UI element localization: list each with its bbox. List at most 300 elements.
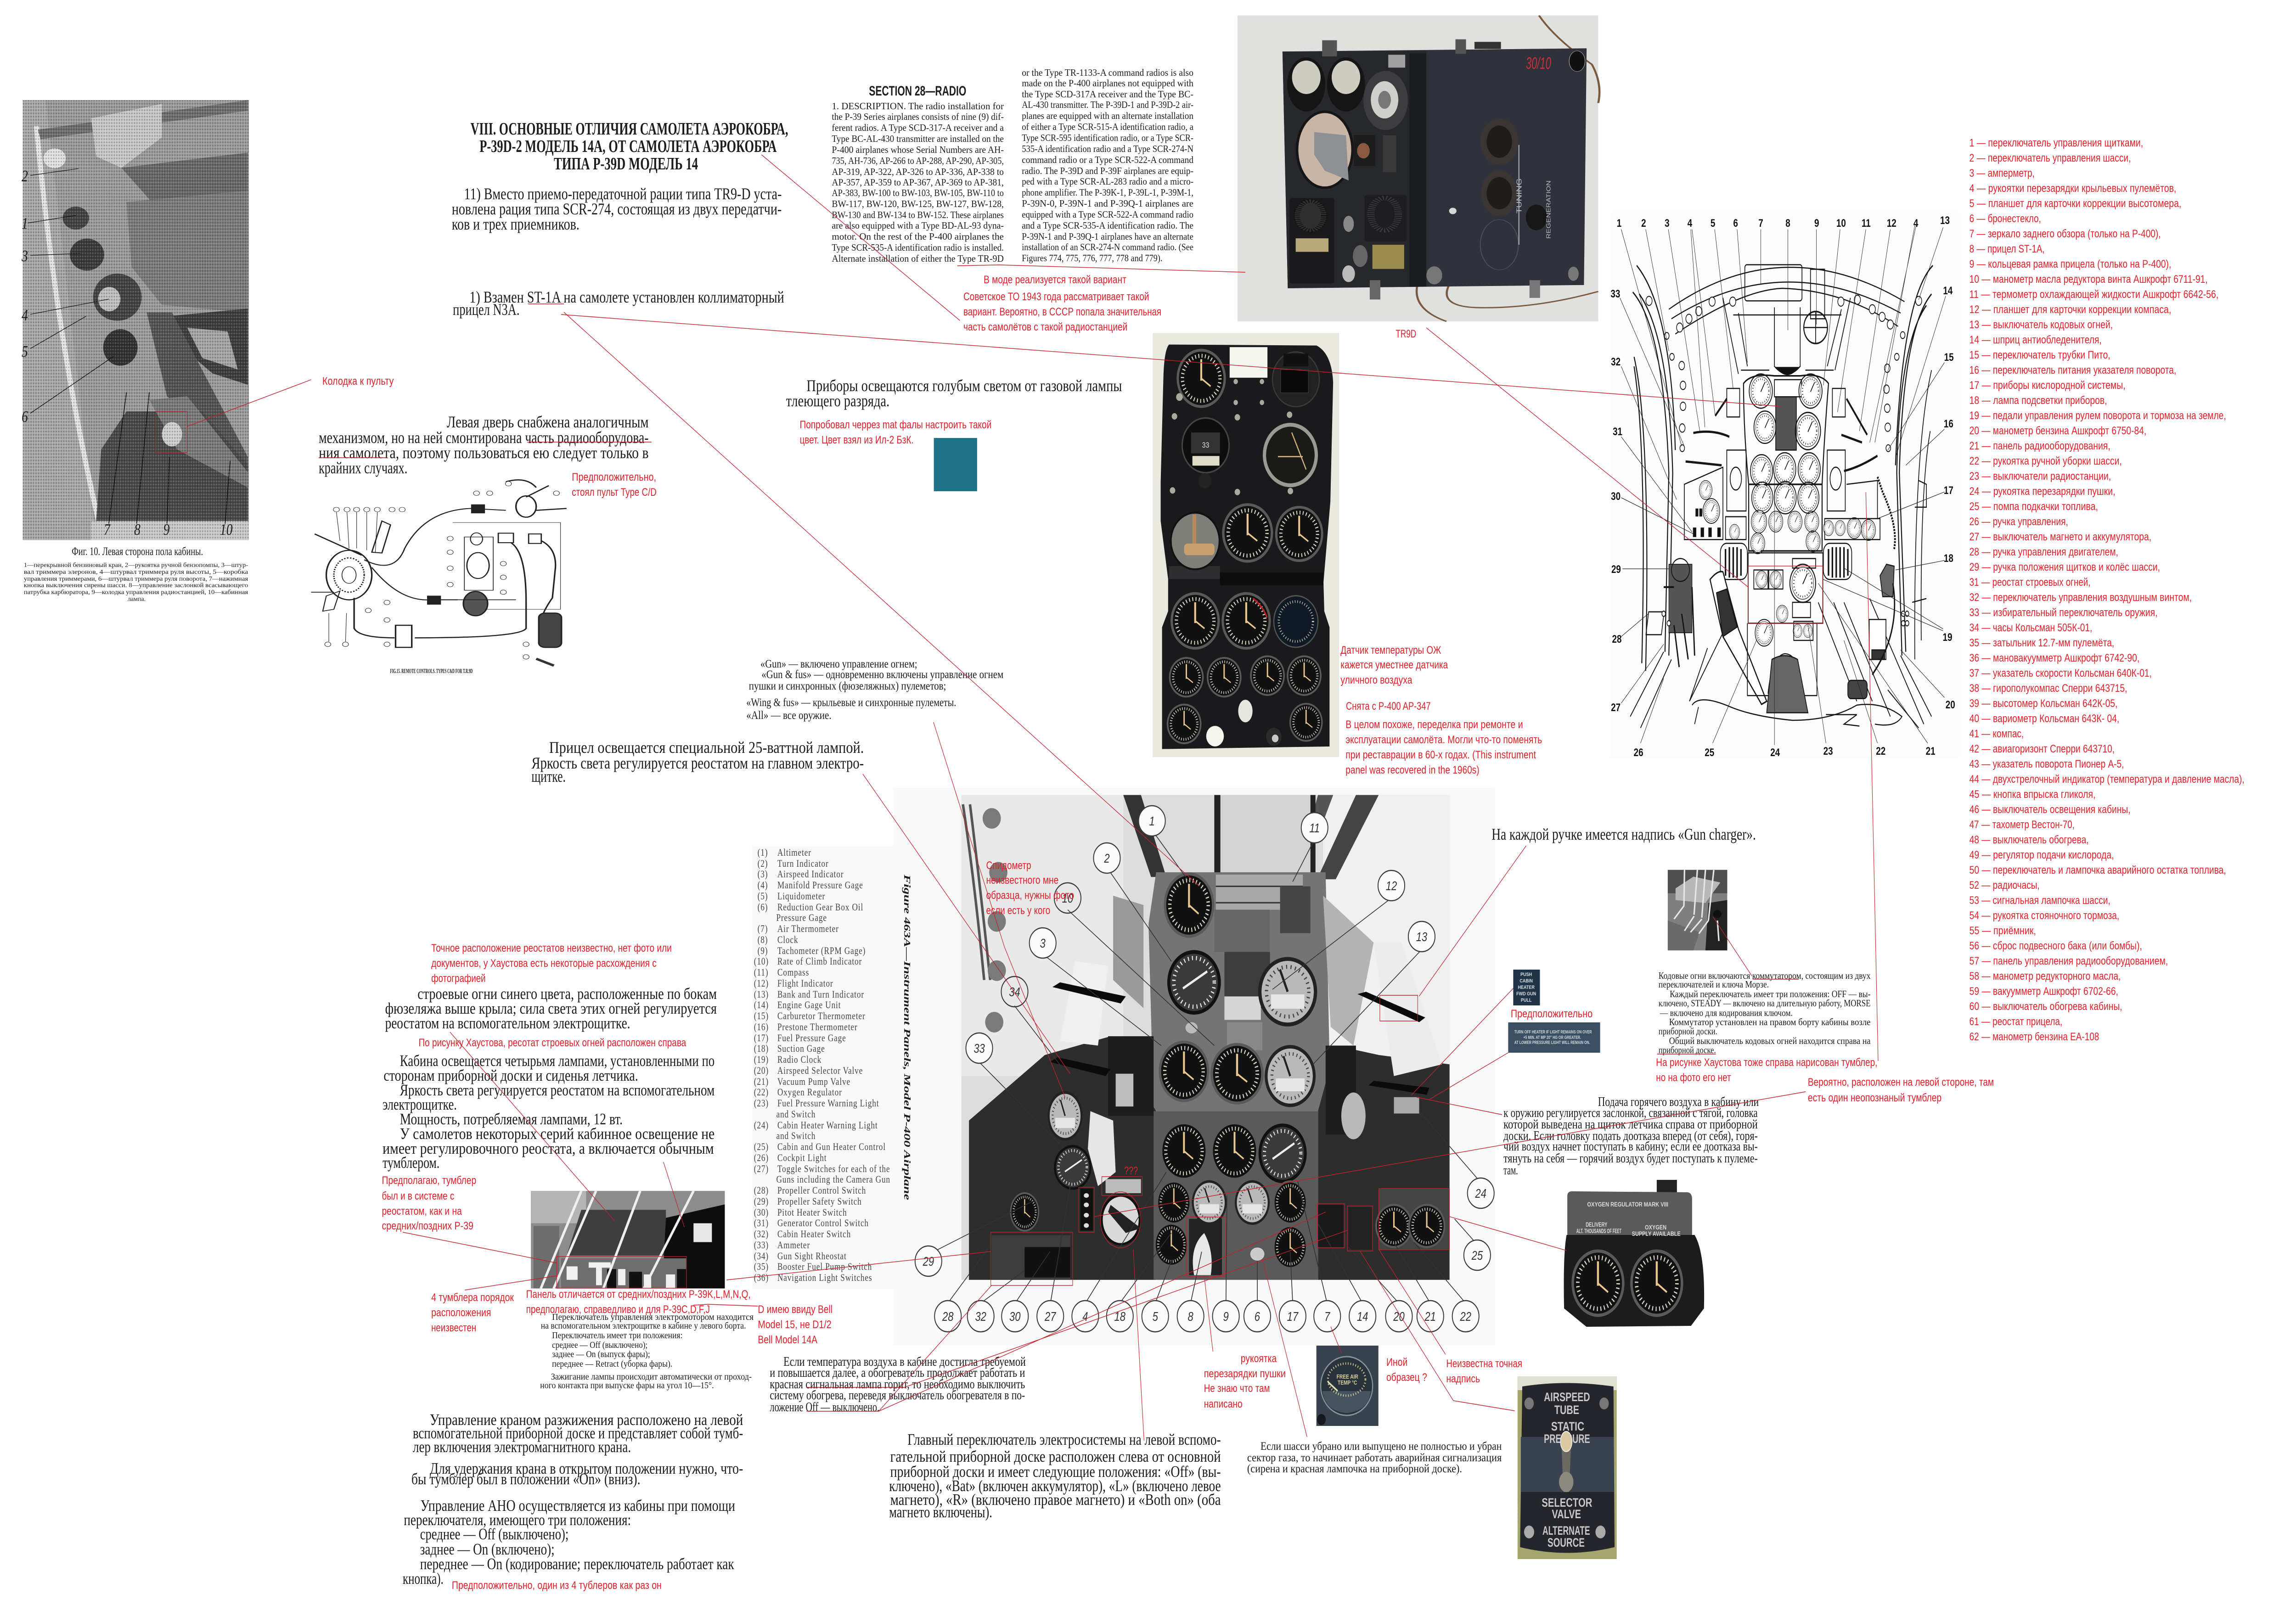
red legend list: numbered cockpit items	[1970, 136, 2245, 1043]
callout numbers: 14	[1943, 284, 1953, 297]
text: weapon selector positions: пушки и синхронных (фюзеляжных) пулеметов;	[749, 679, 946, 692]
red legend list: numbered cockpit items: 29 — ручка положения щитков и колёс шасси,	[1970, 561, 2160, 573]
text block: SECTION 28 RADIO: motor. On the rest of the P-400 airplanes the	[832, 231, 1004, 242]
legend panel: numbered instrument list: Propeller Control Switch	[777, 1185, 866, 1196]
legend panel: numbered instrument list: Oxygen Regulator	[777, 1087, 842, 1098]
note: rheostat location: фотографией	[431, 972, 486, 985]
text: left door: крайних случаях.	[319, 459, 407, 477]
note: remote type C/D: Предположительно,	[572, 471, 656, 483]
text: hot air control: Подача горячего воздуха в кабину или	[1598, 1095, 1759, 1109]
legend panel: numbered instrument list: (30)	[754, 1207, 769, 1218]
callout numbers: 15	[1944, 351, 1954, 364]
note: cannon charging handle: написано	[1204, 1397, 1243, 1410]
red legend list: numbered cockpit items: 45 — кнопка впрыска гликоля,	[1970, 788, 2095, 801]
red legend list: numbered cockpit items: 46 — выключатель освещения кабины,	[1970, 803, 2131, 816]
text block: SECTION 28 RADIO: 735, AH-736, AP-266 to AP-288, AP-290, AP-305,	[832, 156, 1004, 167]
legend panel: numbered instrument list: (16)	[754, 1021, 769, 1033]
callout numbers: 5	[1711, 217, 1715, 230]
red legend list: numbered cockpit items: 40 — вариометр Кольсман 643К- 04,	[1970, 712, 2119, 725]
note: panel differs from later P-39	[526, 1288, 751, 1316]
photo: airspeed tube selector valve placard: SELECTOR	[1542, 1496, 1593, 1510]
text: formation lights: реостатом на вспомогательном электрощитке.	[385, 1014, 630, 1032]
text block: SECTION 28 RADIO: radio. The P-39D and P-39F airplanes are equip-	[1022, 166, 1193, 177]
note: unknown inscription: Неизвестна точная	[1446, 1357, 1522, 1370]
note: Bell model: D имею ввиду Bell	[758, 1303, 833, 1316]
legend panel: numbered instrument list: (33)	[754, 1240, 769, 1251]
legend panel: numbered instrument list: and Switch	[776, 1130, 816, 1142]
text: primer valve control: лер включения электромагнитного крана.	[413, 1438, 631, 1456]
text: formation lights: фюзеляжа выше крыла; сила света этих огней регулируется	[385, 999, 717, 1017]
text block: SECTION 28 RADIO: command radio or a Type SCR-522-A command	[1022, 155, 1194, 166]
text: hot air control	[1503, 1095, 1759, 1178]
numbered circles: 25	[1471, 1249, 1483, 1263]
note: mod variant	[963, 273, 1161, 333]
legend panel: numbered instrument list: (26)	[754, 1152, 769, 1164]
text: code lights: приборной доски.	[1659, 1026, 1717, 1037]
numbered circles: 21	[1424, 1310, 1436, 1324]
callout numbers: 4	[1913, 217, 1918, 230]
text: navigation light control: кнопка).	[403, 1570, 444, 1588]
note: Khaustov toggle	[1656, 1056, 1877, 1084]
callout numbers: 31	[1613, 425, 1622, 438]
red legend list: numbered cockpit items: 13 — выключатель кодовых огней,	[1970, 318, 2113, 331]
note: left side toggle: Вероятно, расположен на левой стороне, там	[1808, 1076, 1994, 1089]
note: mat file colour: цвет. Цвет взял из Ил-2 БзК.	[800, 433, 914, 446]
photo: left side of cockpit floor	[21, 100, 249, 540]
note: unknown inscription	[1446, 1357, 1522, 1385]
legend panel: numbered instrument list: (13)	[754, 989, 769, 1000]
text: landing light control: среднее — Off (выключено);	[552, 1340, 647, 1351]
photo callout numbers: 3	[21, 247, 28, 265]
text: formation lights	[385, 985, 717, 1032]
callout numbers: 32	[1611, 355, 1621, 368]
legend panel: numbered instrument list: (24)	[754, 1120, 769, 1131]
legend panel: numbered instrument list: (28)	[754, 1185, 769, 1196]
note: mat file colour: Попробовал черрез mat фалы настроить такой	[800, 418, 991, 431]
note: cannon charging handle: перезарядки пушки	[1204, 1367, 1286, 1380]
text: master switch: ключено), «Bat» (включен аккумулятор), «L» (включено левое	[889, 1477, 1221, 1495]
text block: SECTION 28 RADIO: 1. DESCRIPTION. The radio installation for	[832, 101, 1004, 112]
red legend list: numbered cockpit items: 22 — рукоятка ручной уборки шасси,	[1970, 454, 2122, 467]
note: coolant gauge: кажется уместнее датчика	[1340, 658, 1448, 671]
text: cabin lights: Кабина освещается четырьмя лампами, установленными по	[400, 1052, 715, 1070]
numbered circles: 2	[1104, 852, 1110, 866]
label: push cabin heater placard: CABIN	[1519, 978, 1533, 984]
callout numbers: 3	[1665, 217, 1670, 230]
legend panel: numbered instrument list: (11)	[754, 967, 768, 978]
note: different sample: Иной	[1386, 1356, 1407, 1369]
legend panel: numbered instrument list: Carburetor Thermometer	[777, 1010, 866, 1022]
numbered circles: 27	[1044, 1310, 1056, 1324]
red legend list: numbered cockpit items: 49 — регулятор подачи кислорода,	[1970, 848, 2114, 861]
text block: SECTION 28 RADIO: Alternate installation of either the Type TR-9D	[832, 253, 1004, 264]
legend panel: numbered instrument list: Ammeter	[777, 1240, 810, 1251]
red legend list: numbered cockpit items: 20 — манометр бензина Ашкрофт 6750-84,	[1970, 424, 2146, 437]
text: landing light control: Переключатель управления электромотором находится	[552, 1312, 754, 1322]
numbered circles: 22	[1460, 1310, 1471, 1324]
note: taken from P-400 AP-347: при реставрации в 60-х годах. (This instrument	[1345, 748, 1536, 761]
text: radio difference: новлена рация типа SCR-274, состоящая из двух передатчи-	[452, 200, 782, 218]
text: radio difference	[452, 185, 782, 233]
red legend list: numbered cockpit items: 59 — вакуумметр Ашкрофт 6702-66,	[1970, 985, 2118, 998]
red legend list: numbered cockpit items: 58 — манометр редукторного масла,	[1970, 970, 2121, 982]
callout numbers: 27	[1611, 701, 1621, 714]
numbered circles	[915, 806, 1494, 1332]
text block: SECTION 28 RADIO: the Type SCD-317A receiver and the Type BC-	[1022, 89, 1193, 100]
diagram: remote controls schematic	[311, 480, 567, 674]
note: Bell model	[758, 1303, 833, 1346]
text: gun sight difference: прицел N3A.	[453, 300, 519, 319]
figure caption: Fig. 10: Фиг. 10. Левая сторона пола кабины.	[72, 545, 203, 558]
legend panel: numbered instrument list: Generator Control Switch	[777, 1218, 869, 1229]
note: panel differs from later P-39: Панель отличается от средних/поздних P-39K,L,M,N,Q,	[526, 1288, 751, 1301]
numbered circles: 32	[975, 1310, 986, 1324]
text: landing light control: Переключатель имеет три положения:	[552, 1330, 682, 1340]
text block: SECTION 28 RADIO: P-39N-1 and P-39Q-1 airplanes have an alternate	[1022, 231, 1193, 242]
text: hot air control: доски. Если головку подать доотказа вперед (от себя), горя-	[1503, 1129, 1758, 1143]
red legend list: numbered cockpit items: 11 — термометр охлаждающей жидкости Ашкрофт 6642-56,	[1970, 288, 2218, 301]
text: cabin lights: Мощность, потребляемая лампами, 12 вт.	[400, 1110, 623, 1128]
label: push cabin heater placard: HEATER	[1518, 985, 1535, 990]
red legend list: numbered cockpit items: 3 — амперметр,	[1970, 167, 2035, 180]
text: cabin lights	[383, 1052, 715, 1172]
text: code lights: Общий выключатель кодовых огней находится справа на	[1669, 1036, 1871, 1047]
red legend list: numbered cockpit items: 15 — переключатель трубки Пито,	[1970, 348, 2110, 361]
schematic caption: FIG.15. REMOTE CONTROLS. TYPES C&D FOR T.R.9D	[390, 668, 473, 674]
photo: TR9D radio set	[1238, 16, 1599, 321]
numbered circles: 24	[1475, 1187, 1486, 1201]
photo callout numbers: 7	[104, 521, 111, 539]
text block: SECTION 28 RADIO: P-400 airplanes whose Serial Numbers are AH-	[832, 145, 1004, 156]
figure caption: Fig. 10: 1—перекрывной бензиновый кран, 2—рукоятка ручной бензопомпы, 3—штур-	[24, 561, 248, 568]
numbered circles: 9	[1223, 1310, 1229, 1324]
callout numbers: 25	[1705, 746, 1714, 759]
red legend list: numbered cockpit items: 5 — планшет для карточки коррекции высотомера,	[1970, 197, 2181, 210]
legend panel: numbered instrument list: Suction Gage	[777, 1043, 825, 1055]
text: hot air control: которой выведена на щиток летчика справа от приборной	[1503, 1118, 1758, 1132]
legend panel: numbered instrument list: Rate of Climb Indicator	[777, 956, 862, 967]
numbered circles: 13	[1416, 930, 1427, 944]
red legend list: numbered cockpit items: 9 — кольцевая рамка прицела (только на Р-400),	[1970, 258, 2171, 270]
note: taken from P-400 AP-347: panel was recovered in the 1960s)	[1345, 763, 1480, 776]
red legend list: numbered cockpit items: 33 — избирательный переключатель оружия,	[1970, 606, 2157, 619]
text: primer valve control: вспомогательной приборной доске и представляет собой тумб-	[413, 1424, 743, 1442]
photo: airspeed tube selector valve placard: ALTERNATE	[1542, 1524, 1590, 1538]
callout numbers: 26	[1634, 746, 1643, 759]
callout numbers: 16	[1944, 417, 1953, 430]
legend panel: numbered instrument list: Liquidometer	[777, 891, 825, 902]
photo callout numbers: 10	[220, 521, 233, 539]
text: cabin lights: У самолетов некоторых серий кабинное освещение не	[400, 1125, 715, 1143]
label: turn off heater placard: AT LOWER PRESSURE LIGHT WILL REMAIN ON.	[1514, 1040, 1590, 1045]
legend panel: numbered instrument list: (17)	[754, 1032, 769, 1044]
text: radio difference: ков и трех приемников.	[452, 215, 580, 233]
note: left side toggle: есть один неопознаный тумблер	[1808, 1091, 1941, 1104]
red legend list: numbered cockpit items: 35 — затыльник 12.7-мм пулемёта,	[1970, 636, 2114, 649]
photo: code light switches	[1668, 870, 1727, 950]
label: push cabin heater placard	[1513, 970, 1540, 1005]
red legend list: numbered cockpit items: 31 — реостат строевых огней,	[1970, 576, 2090, 589]
numbered circles: 28	[942, 1310, 953, 1324]
legend panel: numbered instrument list: (34)	[754, 1251, 769, 1262]
red legend list: numbered cockpit items: 26 — ручка управления,	[1970, 515, 2068, 528]
callout numbers: 2	[1641, 217, 1646, 230]
text: code lights: Кодовые огни включаются коммутатором, состоящим из двух	[1659, 971, 1871, 982]
text block: SECTION 28 RADIO: BW-130 and BW-134 to BW-152. These airplanes	[832, 210, 1004, 221]
text: navigation light control: заднее — On (включено);	[420, 1540, 555, 1558]
legend panel: numbered instrument list: Turn Indicator	[777, 858, 829, 870]
note: speedometer: Спидометр	[986, 859, 1031, 872]
note: taken from P-400 AP-347: Снята с P-400 AP-347	[1346, 700, 1431, 713]
text: instrument lighting: тлеющего разряда.	[786, 392, 889, 410]
note: remote type C/D: стоял пульт Type C/D	[572, 486, 657, 499]
legend panel: numbered instrument list: and Switch	[776, 1109, 816, 1120]
photo: P-400 cockpit instrument panels with numbered circles	[893, 788, 1495, 1346]
legend panel: numbered instrument list: Gun Sight Rheostat	[777, 1251, 847, 1262]
callout numbers: 8	[1785, 217, 1790, 230]
note: different sample	[1386, 1356, 1427, 1384]
photo callout numbers: 2	[22, 167, 28, 185]
legend panel: numbered instrument list: (8)	[758, 934, 768, 946]
photo: free air temperature gauge	[1317, 1346, 1379, 1426]
text block: SECTION 28 RADIO: AP-383, BW-100 to BW-103, BW-105, BW-110 to	[832, 188, 1004, 199]
text: landing light control: ного контакта при выпуске фары на угол 10—15°.	[540, 1380, 714, 1390]
legend panel: numbered instrument list: Tachometer (RPM Gage)	[777, 945, 866, 957]
note: unknown inscription: надпись	[1446, 1372, 1480, 1385]
text: code lights: переключателей и ключа Морзе.	[1659, 979, 1769, 990]
text block: SECTION 28 RADIO: Figures 774, 775, 776, 777, 778 and 779).	[1022, 253, 1162, 264]
legend panel: numbered instrument list: Toggle Switches for each of the	[777, 1163, 890, 1175]
text block: SECTION 28 RADIO: equipped with a Type SCR-522-A command radio	[1022, 209, 1193, 220]
callout numbers: 10	[1836, 217, 1846, 230]
note: speedometer: если есть у кого	[986, 904, 1050, 917]
red legend list: numbered cockpit items: 10 — манометр масла редуктора винта Ашкрофт 6711-91,	[1970, 273, 2208, 286]
text block: SECTION 28 RADIO: Type SCR-595 identification radio, or a Type SCR-	[1022, 133, 1193, 144]
text: gun sight lamp	[531, 738, 864, 786]
text block: SECTION 28 RADIO: BW-117, BW-120, BW-125, BW-127, BW-128,	[832, 199, 1004, 210]
red legend list: numbered cockpit items: 18 — лампа подсветки приборов,	[1970, 394, 2107, 407]
text: landing light control: Зажигание лампы происходит автоматически от проход-	[551, 1371, 752, 1381]
legend panel: numbered instrument list: Engine Gage Unit	[777, 999, 841, 1011]
text block: SECTION 28 RADIO: or the Type TR-1133-A command radios is also	[1022, 67, 1193, 79]
red legend list: numbered cockpit items: 8 — прицел ST-1A,	[1970, 242, 2045, 255]
photo: TR9D radio set: REGENERATION	[1546, 180, 1552, 239]
text: weapon selector positions: «Gun» — включено управление огнем;	[760, 657, 917, 670]
callout numbers: 28	[1612, 633, 1621, 645]
legend panel: numbered instrument list: (2)	[758, 858, 768, 870]
note: coolant gauge	[1340, 644, 1448, 686]
numbered circles: 3	[1040, 937, 1046, 951]
text: weapon selector positions: «All» — все оружие.	[746, 709, 832, 722]
legend panel: numbered instrument list: (25)	[754, 1141, 769, 1153]
text: gear warning: сектор газа, то начинает работать аварийная сигнализация	[1247, 1451, 1502, 1464]
text: gun sight difference	[453, 288, 784, 319]
red legend list: numbered cockpit items: 16 — переключатель питания указателя поворота,	[1970, 364, 2176, 376]
text: master switch: магнето), «R» (включено правое магнето) и «Both on» (оба	[890, 1491, 1221, 1509]
callout numbers: 7	[1758, 217, 1763, 230]
photo: oxygen regulator: ALT. THOUSANDS OF FEET	[1576, 1228, 1621, 1234]
text: cabin lights: тумблером.	[383, 1154, 439, 1172]
text: left door: ния самолета, поэтому пользоваться ею следует только в	[319, 443, 649, 462]
photo: free air temperature gauge: FREE AIR	[1337, 1374, 1358, 1380]
text: landing light control: переднее — Retract (уборка фары).	[552, 1358, 672, 1369]
text: master switch: приборной доски и имеет следующие положения: «Off» (вы-	[890, 1463, 1221, 1481]
label: turn off heater placard: +5 MIN. AT MP 20" HG OR GREATER.	[1523, 1035, 1581, 1040]
text: navigation light control: переднее — On (кодирование; переключатель работает как	[420, 1555, 734, 1573]
callout numbers: 23	[1823, 745, 1833, 758]
legend panel: numbered instrument list	[753, 847, 893, 1289]
text block: SECTION 28 RADIO: Type SCR-535-A identification radio is installed.	[832, 242, 1004, 253]
numbered circles: 33	[974, 1042, 985, 1056]
legend panel: numbered instrument list: (15)	[754, 1010, 769, 1022]
note: mod variant: часть самолётов с такой радиостанцией	[963, 320, 1127, 333]
legend panel: numbered instrument list: (31)	[754, 1218, 769, 1229]
text block: SECTION 28 RADIO	[832, 67, 1194, 264]
text: weapon selector positions	[746, 657, 1003, 722]
note: cannon charging handle: рукоятка	[1241, 1352, 1277, 1365]
photo callout numbers: 5	[22, 342, 28, 360]
legend panel: numbered instrument list: (7)	[758, 923, 768, 935]
text block: SECTION 28 RADIO: are also equipped with a Type BD-AL-93 dyna-	[832, 220, 1004, 231]
photo: airspeed tube selector valve placard: AIRSPEED	[1544, 1391, 1590, 1404]
note: four toggles: 4 тумблера порядок	[431, 1291, 514, 1304]
text: gun sight difference: 1) Взамен ST-1A на самолете установлен коллиматорный	[469, 288, 784, 306]
text block: SECTION 28 RADIO: P-39N-0, P-39N-1 and P-39Q-1 airplanes are	[1022, 198, 1193, 209]
text: heater warning lamp	[770, 1355, 1026, 1414]
photo: airspeed tube selector valve placard: STATIC	[1551, 1420, 1584, 1434]
figure caption: Fig. 10: лампа.	[128, 595, 146, 602]
photo: oxygen regulator: OXYGEN	[1645, 1224, 1666, 1231]
text block: SECTION 28 RADIO: of either a Type SCR-515-A identification radio, a	[1022, 122, 1194, 133]
text: gear warning: Если шасси убрано или выпущено не полностью и убран	[1261, 1440, 1502, 1453]
numbered circles: 10	[1062, 892, 1073, 906]
numbered circles: 11	[1309, 821, 1320, 836]
text: weapon selector positions: «Gun & fus» — одновременно включены управление огнем	[761, 668, 1003, 681]
callout numbers: 17	[1944, 484, 1953, 497]
note: Bell model: Model 15, не D1/2	[758, 1318, 832, 1331]
text: code lights: Каждый переключатель имеет три положения: OFF — вы-	[1670, 989, 1870, 1000]
legend panel: numbered instrument list: (22)	[754, 1087, 769, 1098]
note: presumably: Предположительно	[1511, 1007, 1593, 1020]
text: master switch: магнето включены).	[889, 1503, 992, 1521]
red legend list: numbered cockpit items: 7 — зеркало заднего обзора (только на Р-400),	[1970, 227, 2161, 240]
numbered circles: 34	[1009, 985, 1020, 999]
text block: SECTION 28 RADIO: 535-A identification radio and a Type SCR-274-N	[1022, 144, 1193, 155]
note: mod variant: Советское ТО 1943 года рассматривает такой	[963, 290, 1149, 303]
label: turn off heater placard: TURN OFF HEATER IF LIGHT REMAINS ON OVER	[1514, 1029, 1592, 1034]
text: left door: механизмом, но на ней смонтирована часть радиооборудова-	[319, 428, 649, 447]
text block: SECTION 28 RADIO: and a Type SCR-535-A identification radio. The	[1022, 220, 1193, 231]
text: heater warning lamp: ложение Off — выключено.	[770, 1401, 879, 1414]
photo: TR9D radio set: TUNING	[1515, 178, 1523, 213]
note: rheostat location	[431, 942, 672, 985]
legend panel: numbered instrument list: Cabin and Gun Heater Control	[777, 1141, 886, 1153]
text: heater warning lamp: и повышается далее, а обогреватель продолжает работать и	[770, 1366, 1025, 1380]
photo: P-400 instrument panel	[1153, 333, 1339, 757]
note: coolant gauge: уличного воздуха	[1340, 673, 1412, 686]
note: taken from P-400 AP-347: В целом похоже, переделка при ремонте и	[1345, 718, 1523, 731]
text: gun sight lamp: щитке.	[531, 767, 566, 786]
red legend list: numbered cockpit items: 55 — приёмник,	[1970, 924, 2036, 937]
red legend list: numbered cockpit items: 43 — указатель поворота Пионер А-5,	[1970, 758, 2124, 770]
callout numbers	[1610, 214, 1955, 759]
text block: SECTION 28 RADIO: phone amplifier. The P-39K-1, P-39L-1, P-39M-1,	[1022, 187, 1193, 198]
red legend list: numbered cockpit items: 53 — сигнальная лампочка шасси,	[1970, 894, 2110, 907]
numbered circles: 1	[1149, 814, 1155, 829]
note: cabin light toggle: средних/поздних Р-39	[382, 1219, 473, 1232]
legend panel: numbered instrument list: Bank and Turn Indicator	[777, 989, 864, 1000]
red legend list: numbered cockpit items: 36 — мановакуумметр Ашкрофт 6742-90,	[1970, 651, 2139, 664]
red legend list: numbered cockpit items: 2 — переключатель управления шасси,	[1970, 152, 2131, 164]
legend panel: numbered instrument list: Radio Clock	[777, 1054, 822, 1066]
red legend list: numbered cockpit items: 17 — приборы кислородной системы,	[1970, 379, 2126, 392]
legend panel: numbered instrument list: (4)	[758, 880, 768, 891]
note: speedometer: образца, нужны фото	[986, 889, 1074, 902]
text: code lights: приборной доске.	[1659, 1045, 1716, 1056]
text: gear warning	[1247, 1440, 1502, 1475]
note: coolant gauge: Датчик температуры ОЖ	[1340, 644, 1441, 656]
annotation: red leader lines and highlight boxes	[156, 155, 1878, 1441]
photo callout numbers: 1	[22, 214, 28, 232]
red legend list: numbered cockpit items: 12 — планшет для карточки коррекции компаса,	[1970, 303, 2171, 316]
photo: P-400 instrument panel: 33	[1202, 441, 1210, 449]
numbered circles: 14	[1357, 1310, 1368, 1324]
legend panel: numbered instrument list: Manifold Pressure Gage	[777, 880, 863, 891]
red legend list: numbered cockpit items: 14 — шприц антиобледенителя,	[1970, 333, 2102, 346]
legend panel: numbered instrument list: (36)	[754, 1272, 769, 1284]
text: navigation light control: переключателя, имеющего три положения:	[404, 1511, 631, 1529]
heading: section VIII: ТИПА P-39D МОДЕЛЬ 14	[554, 155, 698, 174]
heading: section VIII: P-39D-2 МОДЕЛЬ 14А, ОТ САМОЛЕТА АЭРОКОБРА	[479, 137, 777, 156]
text: landing light control	[540, 1312, 754, 1390]
text: primer valve control	[411, 1411, 743, 1488]
note: four toggles: расположения	[431, 1306, 491, 1319]
red legend list: numbered cockpit items: 24 — рукоятка перезарядки пушки,	[1970, 485, 2116, 498]
legend panel: numbered instrument list: Airspeed Selector Valve	[777, 1065, 863, 1077]
red legend list: numbered cockpit items: 47 — тахометр Вестон-70,	[1970, 818, 2075, 831]
legend panel: numbered instrument list: (14)	[754, 999, 769, 1011]
note: Khaustov toggle: На рисунке Хаустова тоже справа нарисован тумблер,	[1656, 1056, 1877, 1069]
note: cannon charging handle	[1204, 1352, 1286, 1410]
legend panel: numbered instrument list: (27)	[754, 1163, 769, 1175]
note: panel differs from later P-39: предполагаю, справедливо и для Р-39С,D,F,J	[526, 1303, 710, 1316]
text block: SECTION 28 RADIO: AP-319, AP-322, AP-326 to AP-336, AP-338 to	[832, 167, 1004, 178]
figure caption: Fig. 10: патрубка карбюратора, 9—колодка управления радиостанцией, 10—кабинная	[24, 589, 248, 595]
legend panel: numbered instrument list: (19)	[754, 1054, 769, 1066]
callout numbers: 33	[1610, 287, 1620, 300]
legend panel: numbered instrument list: (10)	[754, 956, 769, 967]
photo: airspeed tube selector valve placard: SOURCE	[1548, 1536, 1585, 1550]
legend panel: numbered instrument list: Pitot Heater Switch	[777, 1207, 847, 1218]
legend panel: numbered instrument list: Booster Fuel Pump Switch	[777, 1261, 872, 1273]
legend panel: numbered instrument list: Guns including the Camera Gun	[776, 1174, 890, 1185]
callout numbers: 9	[1814, 217, 1819, 230]
red legend list: numbered cockpit items: 57 — панель управления радиооборудованием,	[1970, 954, 2168, 967]
text: formation lights: строевые огни синего цвета, расположенные по бокам	[417, 985, 717, 1003]
numbered circles: 20	[1393, 1310, 1405, 1324]
note: mod variant: В моде реализуется такой вариант	[984, 273, 1126, 286]
text: code lights: — включено для кодирования ключом.	[1660, 1008, 1793, 1019]
text: landing light control: заднее — On (выпуск фары);	[552, 1349, 650, 1360]
text: cabin lights: имеет регулировочного реостата, а включается обычным	[383, 1139, 714, 1157]
red legend list: numbered cockpit items: 52 — радиочасы,	[1970, 879, 2040, 892]
callout numbers: 1	[1617, 217, 1621, 230]
legend panel: numbered instrument list: (3)	[758, 869, 768, 880]
callout numbers: 18	[1944, 552, 1953, 565]
red legend list: numbered cockpit items: 41 — компас,	[1970, 727, 2024, 740]
text: primer valve control: Для удержания крана в открытом положении нужно, что-	[430, 1459, 743, 1477]
legend panel: numbered instrument list: Air Thermometer	[777, 923, 839, 935]
